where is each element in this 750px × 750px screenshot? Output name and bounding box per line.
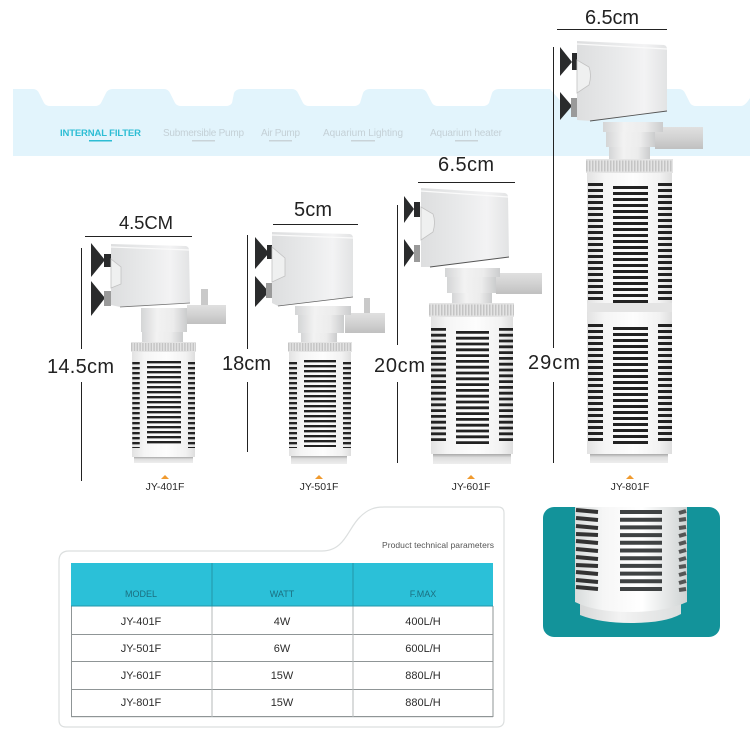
table row JY-801F: JY-801F (121, 697, 162, 709)
filter base (291, 456, 347, 464)
neck (603, 122, 663, 160)
upper intake slots (596, 183, 665, 303)
product: JY-801F (528, 7, 703, 493)
outlet pipe (187, 289, 226, 324)
width dimension 4.5CM: 4.5CM (119, 212, 173, 233)
height dimension 20cm: 20cm (374, 355, 425, 377)
model label JY-501F (300, 475, 338, 493)
table row JY-501F: JY-501F (121, 643, 162, 655)
model label JY-401F (146, 475, 184, 493)
intake slots (136, 361, 192, 448)
filter base collar (580, 602, 681, 623)
neck (445, 268, 500, 304)
table row JY-401F (71, 606, 493, 634)
product: JY-501F (222, 199, 385, 493)
tab: internal filter: INTERNAL FILTER (60, 128, 141, 139)
table row JY-801F: 880L/H (405, 697, 441, 709)
filter body (289, 352, 351, 456)
outlet pipe (345, 298, 385, 333)
tab: aquarium lighting: Aquarium Lighting (323, 128, 403, 139)
panel: technical parameters (59, 507, 504, 727)
width dimension 5cm (273, 199, 358, 225)
filter rim (586, 159, 673, 173)
model label JY-501F: JY-501F (300, 481, 338, 493)
table header (71, 563, 493, 606)
filter rim (429, 303, 514, 317)
table row JY-401F: 400L/H (405, 616, 441, 628)
height dimension 29cm: 29cm (528, 352, 580, 374)
intake slots (293, 360, 347, 448)
table header: MODEL (125, 589, 157, 599)
top banner with tabs (13, 89, 750, 156)
suction cups (255, 237, 273, 307)
intake slots (438, 328, 506, 444)
table row JY-501F (71, 634, 493, 661)
filter cylinder (575, 507, 687, 612)
height dimension 14.5cm: 14.5cm (47, 356, 114, 378)
suction cups (560, 47, 577, 120)
pump head (421, 188, 509, 267)
width dimension 5cm: 5cm (294, 199, 332, 221)
suction cups (91, 243, 111, 316)
width dimension 6.5cm: 6.5cm (585, 7, 639, 29)
neck (141, 308, 187, 343)
model label JY-401F: JY-401F (146, 481, 184, 493)
filter base (590, 454, 668, 463)
table header: WATT (270, 589, 295, 599)
product: JY-601F (374, 154, 542, 493)
table row JY-501F: 6W (274, 643, 291, 655)
card outline (59, 507, 504, 727)
teal background (543, 507, 720, 637)
suction cups (404, 196, 420, 267)
pump head (272, 232, 353, 306)
table caption: Product technical parameters (382, 540, 494, 550)
outlet pipe (496, 273, 542, 294)
table row JY-801F: 15W (271, 697, 294, 709)
table row JY-501F: 600L/H (405, 643, 441, 655)
pump head (577, 41, 667, 121)
tab: submersible pump: Submersible Pump (163, 128, 244, 139)
pump head (111, 244, 190, 307)
width dimension 6.5cm (557, 7, 667, 30)
width dimension 6.5cm (418, 154, 515, 183)
neck (295, 306, 351, 343)
filter body (132, 352, 195, 457)
model label JY-801F (611, 475, 649, 493)
lower intake slots (596, 324, 665, 444)
tab: aquarium heater: Aquarium heater (430, 128, 503, 139)
table header: F.MAX (410, 589, 436, 599)
table row JY-601F: 880L/H (405, 670, 441, 682)
model label JY-601F (452, 475, 490, 493)
panel: base detail photo (543, 507, 720, 637)
product: JY-401F (47, 212, 226, 493)
filter body (587, 173, 672, 454)
cylinder slots (576, 510, 686, 594)
height dimension 18cm: 18cm (222, 353, 271, 375)
filter rim (288, 342, 352, 352)
model label JY-601F: JY-601F (452, 481, 490, 493)
section joint (587, 303, 672, 312)
table row JY-601F: JY-601F (121, 670, 162, 682)
table row JY-401F: 4W (274, 616, 291, 628)
table row JY-801F (71, 689, 493, 717)
tab: air pump: Air Pump (261, 128, 300, 139)
width dimension 4.5CM (85, 212, 192, 237)
outlet pipe (655, 127, 703, 149)
table row JY-601F: 15W (271, 670, 294, 682)
table row JY-601F (71, 661, 493, 689)
filter base (433, 454, 511, 464)
model label JY-801F: JY-801F (611, 481, 649, 493)
filter base (134, 457, 193, 463)
filter body (431, 317, 513, 454)
width dimension 6.5cm: 6.5cm (438, 154, 494, 176)
filter rim (131, 342, 196, 352)
table row JY-401F: JY-401F (121, 616, 162, 628)
